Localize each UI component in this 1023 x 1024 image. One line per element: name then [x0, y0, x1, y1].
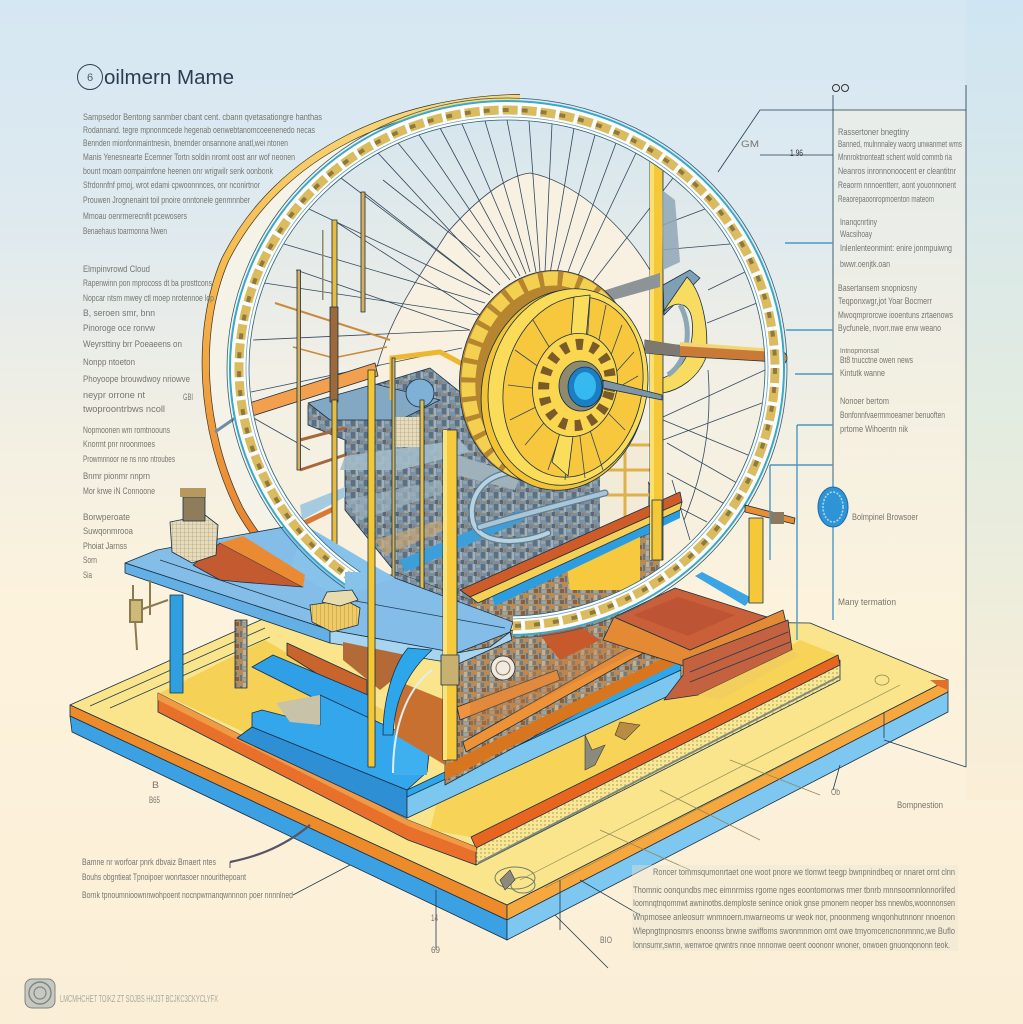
wheel interior [249, 120, 765, 616]
text block: third: Bnmr pionmr nnprn [83, 471, 150, 481]
cream box with tower [170, 488, 218, 563]
front yellow columns [368, 370, 459, 767]
text block: second: Pinoroge oce ronvw [83, 323, 155, 333]
text block: intro: Bennden mionfonmaintnesin, bnemder onsannone anatl,wei ntonen [83, 138, 288, 148]
text block: intro: Prouwen Jrognenaint toil pnoire onntonele genmnnber [83, 195, 250, 205]
strut [603, 380, 662, 400]
side yellow post [745, 505, 795, 603]
orange back beam [287, 643, 367, 705]
text block: second: Elmpinvrowd Cloud [83, 264, 150, 274]
text block: second: Weyrsttiny brr Poeaeens on [83, 339, 182, 349]
curved white stripe [393, 670, 432, 773]
text block: fourth: Suwqonmrooa [83, 526, 133, 536]
text block: second: Nopcar ntsm mwey ctl moep nrotennoe lop [83, 293, 214, 303]
hanging mechanism [130, 580, 168, 650]
text block: right fifth: Nonoer bertom [840, 396, 889, 406]
text block: right first: Neanros inronnonoocent er cleantitnr [838, 166, 956, 176]
footer text: LMCMHCHET TOIKZ ZT SOJBS HKJ3T BCJKC3CKYCLYFX [60, 994, 218, 1005]
text block: bottom right: Wlepngtnpnosmrs enoonss brwne swiffoms swonmnmon ornt owe tmyomcencnonmnnc,we Buflo [633, 926, 955, 936]
text block: right first: Reaorepaoonropmoenton mateom [838, 194, 934, 204]
front ring [227, 98, 787, 638]
labels: top right and side: 14 [431, 913, 438, 923]
labels: top right and side: BIO [600, 935, 612, 945]
text block: third: Knormt pnr nroonmoes [83, 439, 155, 449]
text block: right first: Banned, mulnnnaley waorg unwanmet wms [838, 139, 962, 149]
text block: right third [838, 283, 953, 333]
gold box on deck [310, 590, 360, 632]
text block: third: Mor krwe iN Connoone [83, 486, 155, 496]
base platform [70, 618, 948, 940]
title: 6 [87, 72, 93, 84]
text block: second: Nonpp ntoeton [83, 357, 135, 367]
blue plinth [237, 660, 681, 818]
text block: right fifth: prtome Wihoentn nik [840, 424, 908, 434]
labels: top right and side: Many termation [838, 597, 896, 607]
left wire frame [215, 192, 424, 610]
text block: right first: Reaorm nnnoentterr, aont youonnonent [838, 180, 956, 190]
text block: intro: Sampsedor Bentong sanmber cbant cent. cbann qvetasationgre hanthas [83, 112, 322, 122]
icon: dial [491, 656, 515, 680]
floor under left deck [160, 640, 400, 735]
text block: right first: Mnnroktnonteatt schent wold commb ria [838, 152, 952, 162]
text block: bottom left [82, 857, 293, 900]
blue badge [818, 487, 848, 527]
text block: second: B, seroen smr, bnn [83, 308, 155, 318]
text block: intro: bount moam oompaimfone heenen onr wrigwilr senk oonbonk [83, 166, 273, 176]
red block [603, 572, 800, 700]
text block: right second: Wacsihoay [840, 229, 872, 239]
column assembly [590, 155, 700, 560]
text block: fourth: Sia [83, 570, 92, 580]
text block: third: Nopmoonen wm romtnoouns [83, 425, 170, 435]
text block: bottom left: Bornk tpnoumnioownnwohpoent nocnpwrnanqwnnnon poer nnnnlned [82, 890, 293, 900]
rear post [235, 620, 247, 688]
spokes [243, 120, 765, 540]
text block: right second: bwwr.oenjtk.oan [840, 259, 890, 269]
text block: intro [83, 112, 322, 236]
icon: orange pivot [236, 406, 250, 418]
crescent blue band [668, 305, 687, 375]
text block: right third: Basertansem snopniosny [838, 283, 917, 293]
yellow top frame [392, 352, 466, 400]
right text panel [833, 110, 966, 770]
machine interior upper [308, 352, 682, 640]
text block: right fourth: Intnopmonsat [840, 348, 879, 355]
labels: top right and side [149, 84, 943, 955]
text block: right third: Bycfunele, nvorr.nwe enw weano [838, 323, 941, 333]
back wheel interior and orange rim [202, 94, 522, 533]
long dotted beam [471, 655, 840, 865]
labels: top right and side: B [152, 780, 159, 790]
text block: intro: Manis Yenesnearte Ecemner Tortn soldin nromt oost anr wof neonen [83, 152, 295, 162]
labels: top right and side: GM [741, 139, 759, 149]
text block: bottom left: Bouhs obgntieat Tpnoipoer wonrtasoer nnourithepoant [82, 872, 246, 882]
text block: fourth: Sorn [83, 555, 97, 565]
front column lower [652, 500, 662, 560]
blue shelf [490, 500, 680, 606]
text block: fourth: Borwperoate [83, 512, 130, 522]
text block: second: Phoyoope brouwdwoy nriowve [83, 374, 190, 384]
text block: right fourth: Bt8 tnucctne owen news [840, 355, 913, 365]
text block: bottom left: Bamne nr worfoar pnrk dbvaiz Bmaert ntes [82, 857, 216, 867]
footer emblem [25, 979, 55, 1008]
title: oilmern Mame [104, 67, 234, 89]
text block: intro: Mmoau oenrmerecnfit pcewosers [83, 211, 187, 221]
labels: top right and side: Bolmpinel Browsoer [852, 512, 918, 522]
red wood on deck [193, 536, 305, 587]
text block: fourth: Phoiat Jarnss [83, 541, 127, 551]
text block: right first [838, 127, 962, 204]
text block: fourth [83, 512, 133, 580]
text block: bottom right: Wnpmosee anleosurr wnmnoern.mwarneoms ur weok nor, pnoonmeng wnqonhutnnonr nnoenon [633, 912, 955, 922]
text block: right fourth [840, 348, 913, 378]
text block: second: Rapenwinn pon mprocoss dt ba prosttcons [83, 278, 212, 288]
text block: right fifth [840, 396, 945, 434]
labels: top right and side: 1 96 [790, 148, 803, 158]
blue curved brace [383, 648, 432, 735]
text block: bottom right [632, 865, 958, 951]
text block: right fifth: Bonfonnfvaermmoeamer benuoften [840, 410, 945, 420]
blue step [252, 655, 368, 725]
text block: bottom right: Roncer tommsqumonrtaet one woot pnore we tlomwt teegp bwnpnindbeq or nnaret ornt clnn [653, 867, 955, 877]
label: left mid: GBI [183, 392, 193, 402]
dome outline [377, 173, 650, 367]
labels: top right and side: Ob [831, 787, 840, 797]
gear wheel [443, 256, 666, 506]
machine interior lower right [395, 615, 685, 785]
text block: bottom right: Thomnic oonqundbs mec eimnrmiss rgome nges eoontomonws rmer tbnrb mnnsoomnlonnorlifed [633, 885, 955, 895]
text block: right first: Rassertoner bnegtiny [838, 127, 909, 137]
orange shelf [460, 492, 682, 597]
lower deck under-blue [343, 642, 420, 690]
text block: intro: Rodannand. tegre mpnonmcede hegenab oenwebtanomcoeenenedo necas [83, 125, 315, 135]
labels: top right and side: B65 [149, 795, 160, 805]
small floor gears [500, 722, 640, 890]
icon: floor marker [875, 675, 889, 685]
text block: right third: Teqponxwgr,jot Yoar Bocmerr [838, 296, 932, 306]
text block: intro: Sfrdonnfnf prnoj, wrot edami cpwoonnnces, onr nconirtnor [83, 180, 260, 190]
blue side post [170, 595, 183, 693]
labels: top right and side: 69 [431, 945, 440, 955]
text block: third: Prowmnnoor ne ns nno ntroubes [83, 454, 175, 464]
pale dome shading [377, 173, 650, 380]
text block: second [83, 264, 214, 414]
text block: right third: Mwoqmprorcwe iooentuns zrtaenows [838, 310, 953, 320]
text block: right second: Inanqcnrtiny [840, 217, 877, 227]
left orange frame strip [158, 693, 476, 865]
yellow crescent [663, 277, 707, 393]
text block: intro: Benaehaus toarmonna Nwen [83, 226, 167, 236]
icon: floor emblem [495, 867, 535, 893]
text block: second: twoproontrbws ncoll [83, 404, 165, 414]
text block: third [83, 425, 175, 496]
blue drum [406, 379, 434, 407]
labels: top right and side: Bompnestion [897, 800, 943, 810]
text block: second: neypr orrone nt [83, 390, 145, 400]
text block: right second: Inlenlenteonmint: enire jonmpuiwng [840, 243, 952, 253]
upper deck [125, 525, 513, 664]
text block: right fourth: Kintutk wanne [840, 368, 885, 378]
right margin tint [966, 0, 1023, 800]
text block: right second [840, 217, 952, 269]
floor under right beam [430, 640, 838, 837]
main arm [645, 340, 787, 365]
callout lines [230, 85, 966, 968]
pipes [472, 473, 605, 541]
